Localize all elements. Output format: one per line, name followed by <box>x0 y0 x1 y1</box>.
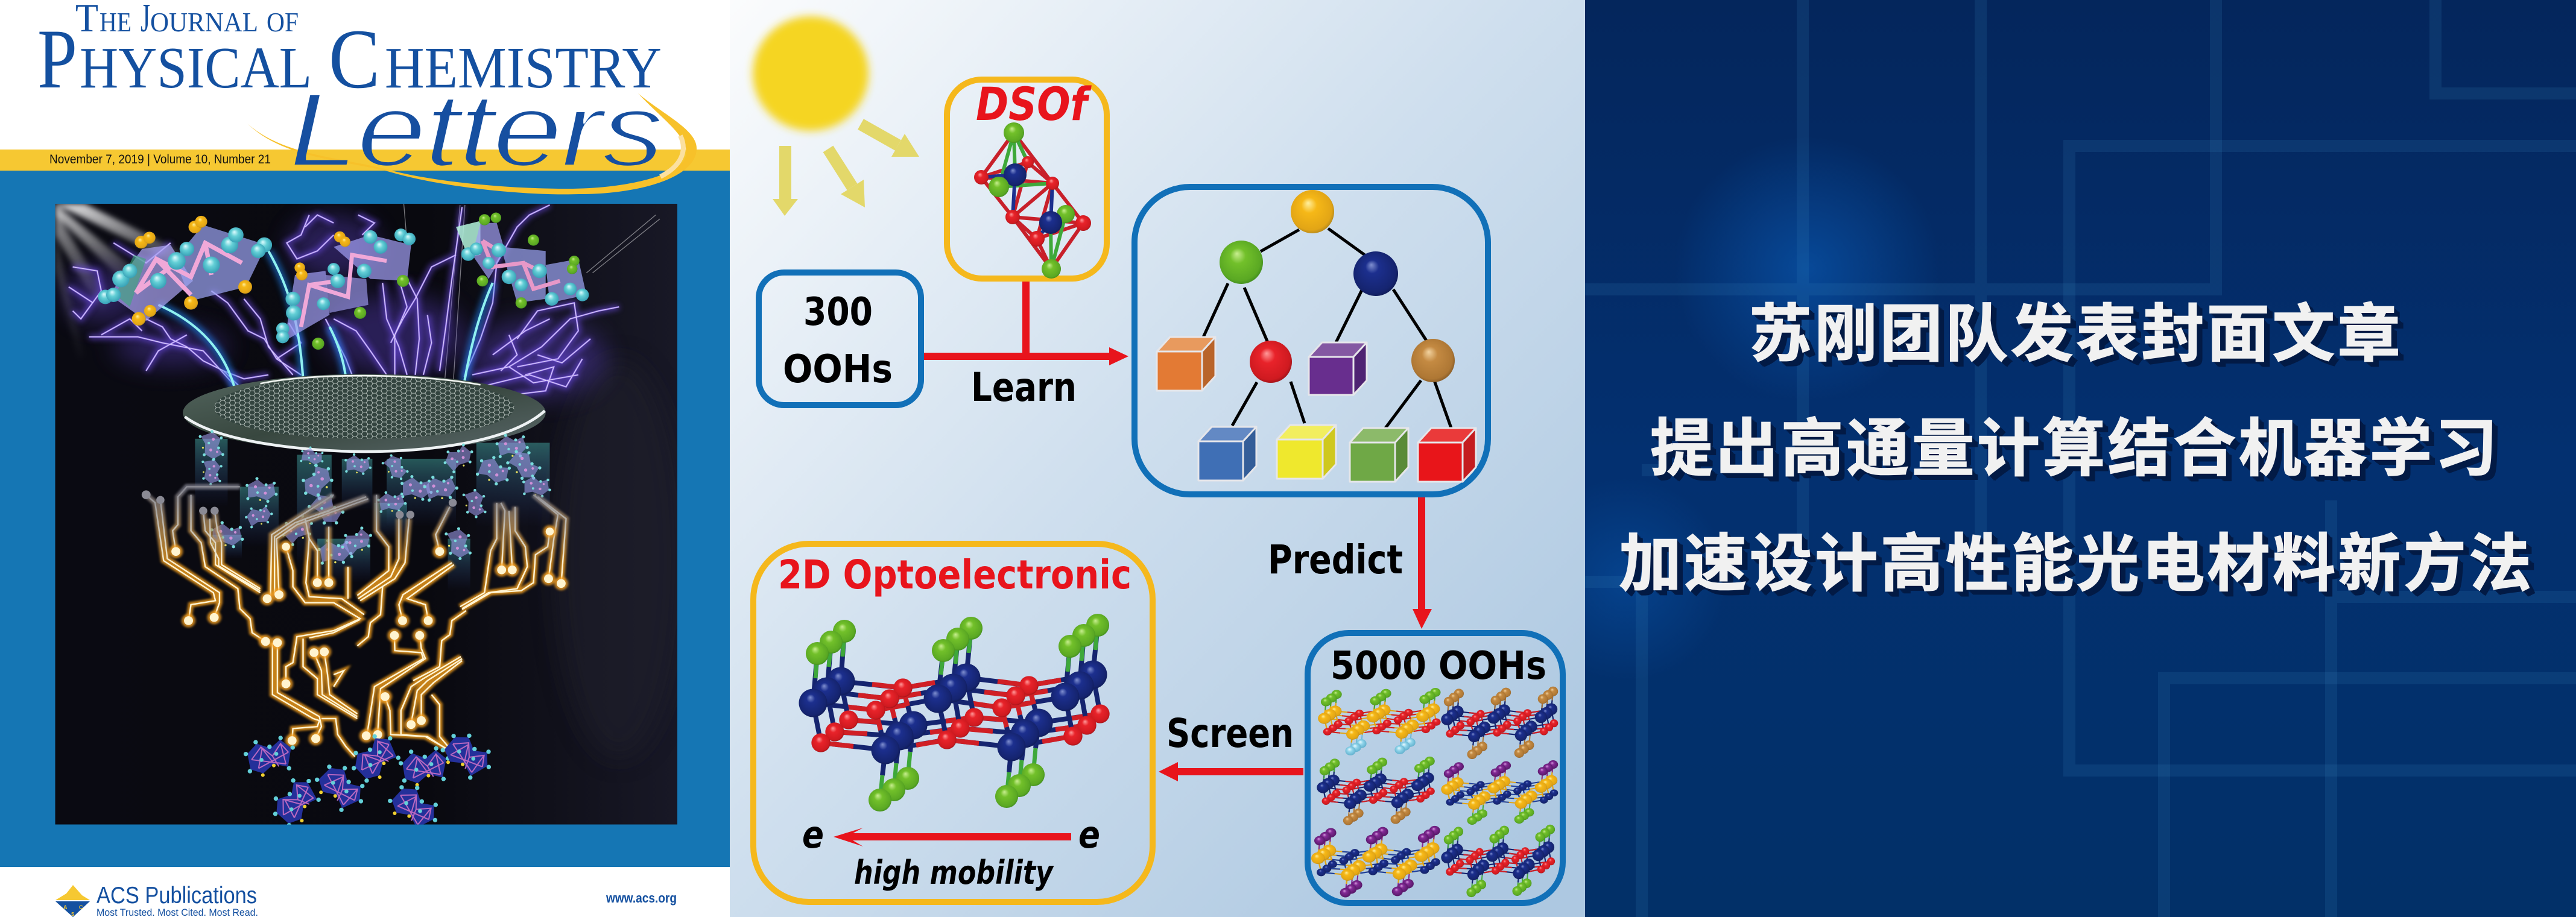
ACS logo: C <box>79 904 83 910</box>
graphene disc <box>183 374 546 452</box>
lightning <box>69 205 619 395</box>
issue date: November 7, 2019 | Volume 10, Number 21 <box>49 153 271 166</box>
blue cover field <box>0 171 730 867</box>
electron transport arrow: e <box>1078 813 1100 857</box>
tree leaf cubes <box>1157 337 1476 482</box>
gold swoosh <box>247 93 697 194</box>
panel: machine learning workflow <box>730 0 1586 917</box>
arrow: predict <box>1413 497 1432 629</box>
perovskite fragments <box>198 429 553 565</box>
masthead: Physical Chemistry: P <box>37 12 77 106</box>
box: 5000 OOHs: 5000 OOHs <box>1331 644 1546 689</box>
teal energy arcs <box>156 247 499 388</box>
light beams under disc <box>195 439 549 591</box>
headline line 1: 苏刚团队发表封面文章 <box>1749 300 2403 370</box>
tree nodes <box>1220 190 1455 383</box>
masthead: Physical Chemistry: C <box>329 12 380 106</box>
panel: journal cover <box>0 0 731 917</box>
left chain <box>98 216 272 326</box>
sunlight arrows <box>773 124 919 216</box>
box: 5000 OOHs <box>1308 633 1563 903</box>
box: 300 OOHs: OOHs <box>783 347 893 392</box>
panel: headline background <box>1523 0 2576 917</box>
masthead: Physical Chemistry <box>37 12 662 106</box>
box title: 2D Optoelectronic <box>778 552 1131 598</box>
ACS Publications wordmark: ACS Publications <box>97 883 257 909</box>
middle chain <box>276 228 416 350</box>
masthead: The Journal of: HE <box>100 7 131 37</box>
masthead: Physical Chemistry: HEMISTRY <box>385 36 662 101</box>
circuit nodes <box>142 490 566 745</box>
light rays <box>55 204 660 439</box>
selected crystal structure <box>799 614 1110 811</box>
masthead: Physical Chemistry: HYSICAL <box>80 36 312 101</box>
label: Learn: Learn <box>971 364 1077 411</box>
headline line 3: 加速设计高性能光电材料新方法 <box>1619 529 2534 599</box>
purple haze <box>65 215 607 399</box>
website: www.acs.org <box>606 890 677 906</box>
headline line 2: 提出高通量计算结合机器学习 <box>1650 414 2500 484</box>
ACS Publications wordmark <box>97 883 258 917</box>
icon: sun <box>753 16 919 216</box>
crystal chains <box>98 213 589 350</box>
masthead: Letters: Letters <box>290 71 663 189</box>
masthead: The Journal of: OF <box>267 7 299 37</box>
circuit traces <box>146 487 566 757</box>
masthead: The Journal of <box>75 0 299 40</box>
DSOf crystal unit <box>974 122 1091 279</box>
cover artwork <box>55 204 685 839</box>
electron transport arrow: e <box>802 813 824 857</box>
box: DSOf descriptor <box>947 77 1107 279</box>
arrow: screen <box>1159 762 1303 781</box>
DSOf label: DSOf <box>976 77 1092 131</box>
box: 300 OOHs: 300 <box>803 290 873 335</box>
tree branches <box>1201 228 1454 435</box>
label: Screen: Screen <box>1166 710 1294 757</box>
small molecules at bottom <box>242 725 499 839</box>
ACS logo <box>55 885 90 917</box>
electron transport arrow <box>802 813 1100 857</box>
box: decision tree <box>1135 187 1488 494</box>
arrow: learn <box>924 282 1128 365</box>
yellow date band <box>0 150 730 171</box>
box: 300 OOHs <box>759 273 921 405</box>
ACS logo: A <box>63 904 68 910</box>
masthead: The Journal of: OURNAL <box>150 7 258 37</box>
caption: high mobility: high mobility <box>854 854 1054 892</box>
right chain <box>456 213 589 309</box>
ACS logo: S <box>71 912 75 917</box>
box: 2D Optoelectronic <box>753 544 1153 902</box>
label: Predict: Predict <box>1268 537 1403 583</box>
candidate structures <box>1311 687 1558 897</box>
